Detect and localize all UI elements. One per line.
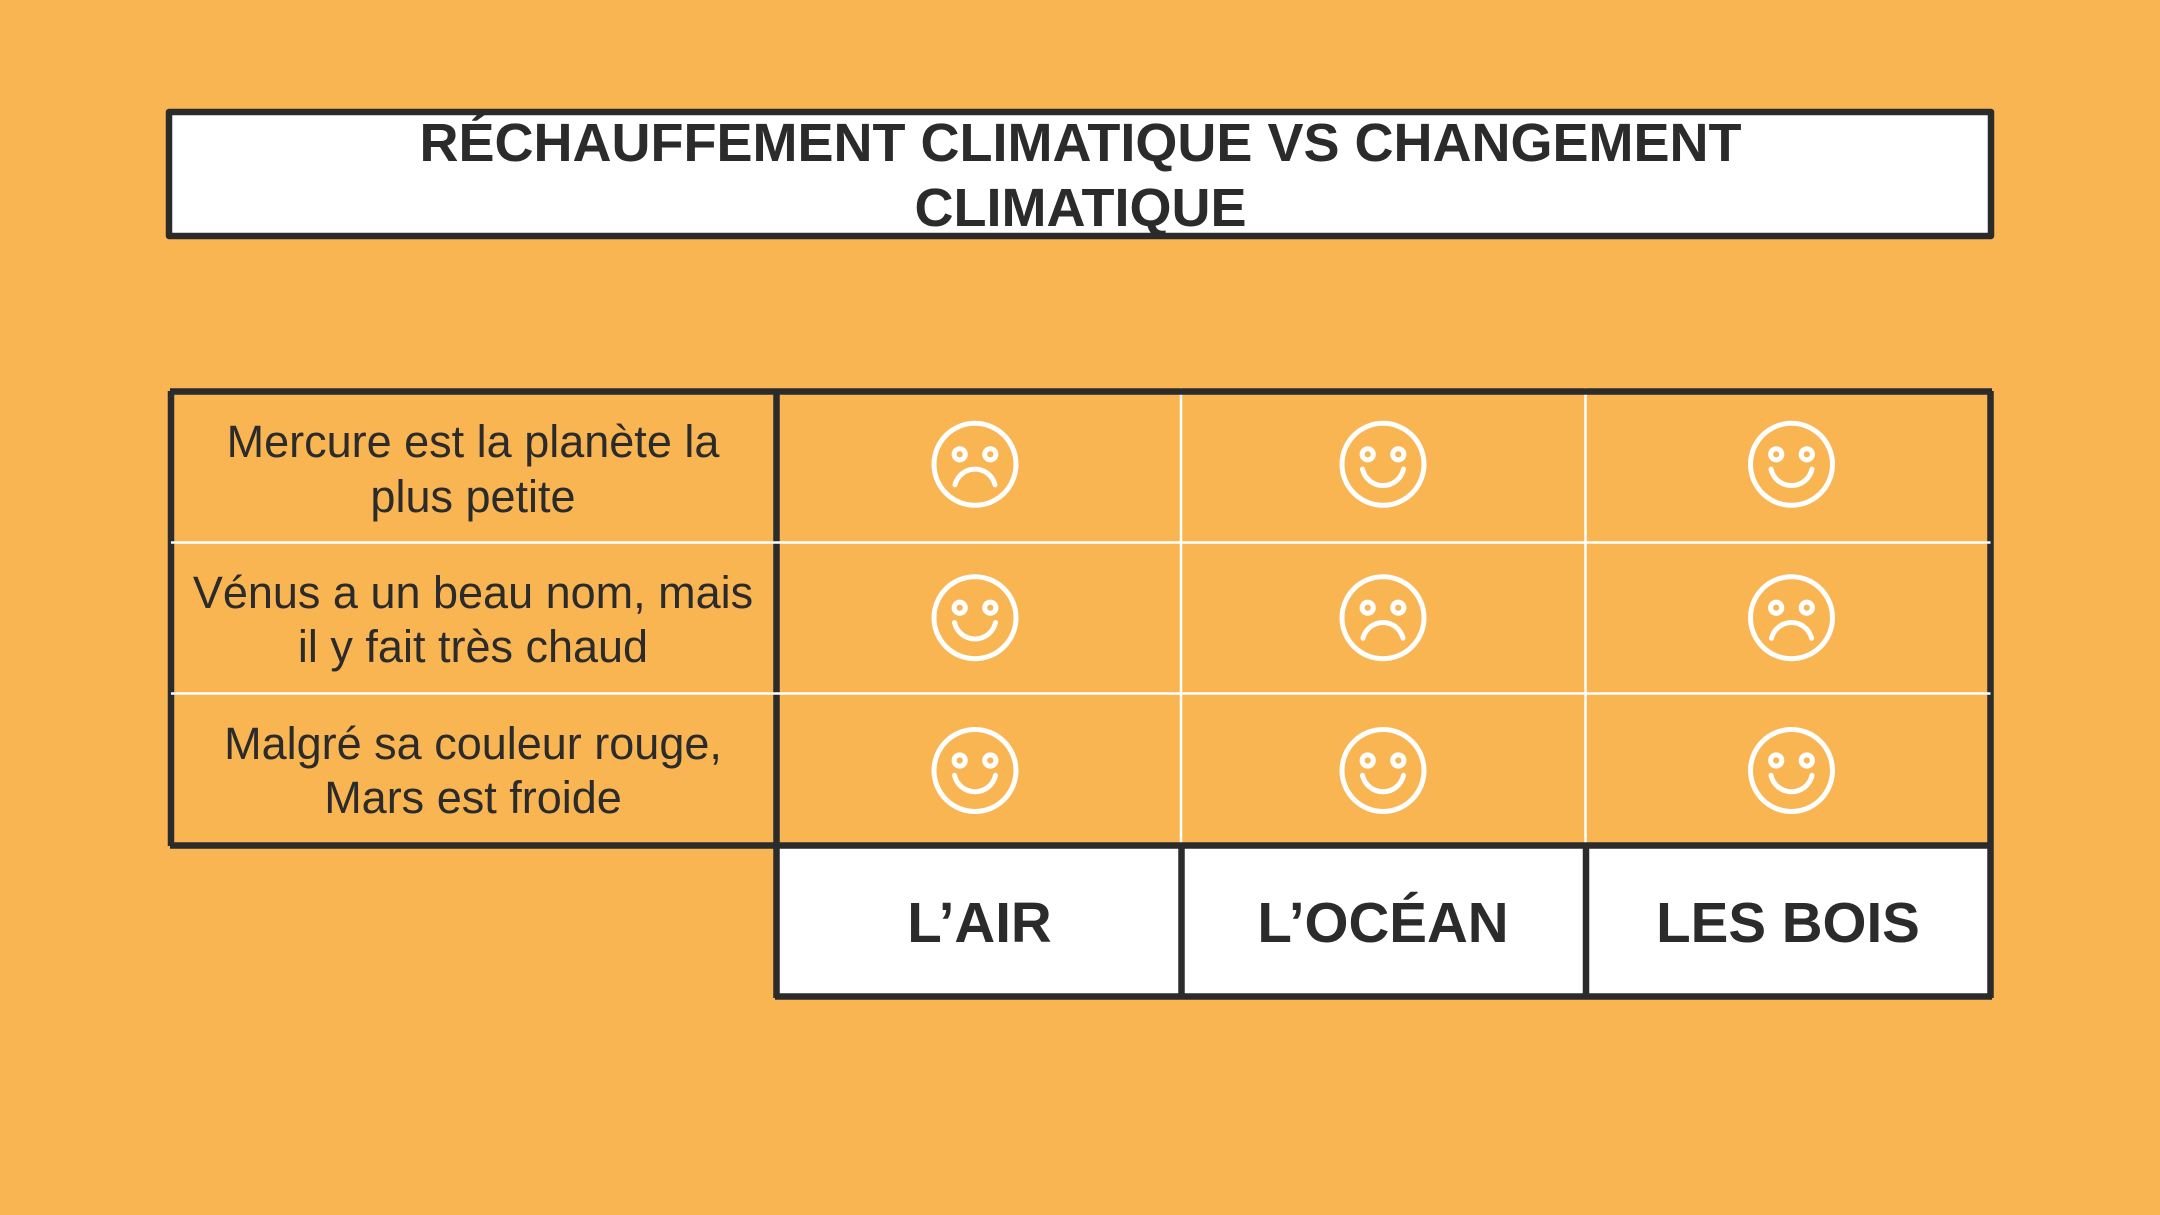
icon: happy face row 2 col 1 [934, 577, 1016, 659]
icon: happy face row 3 col 3 [1750, 730, 1832, 812]
row label 1: plus petite [370, 471, 576, 522]
label: LES BOIS: LES BOIS [1656, 891, 1920, 954]
icon: sad face row 1 col 1 [934, 423, 1016, 505]
label: L'AIR: L’AIR [907, 891, 1052, 954]
table grid [170, 388, 1992, 998]
row label 2 [193, 567, 753, 672]
icon: happy face row 1 col 2 [1342, 423, 1424, 505]
row label 2: il y fait très chaud [298, 621, 648, 672]
icon: sad face row 2 col 3 [1750, 577, 1832, 659]
title banner: CLIMATIQUE [915, 178, 1246, 238]
icon: happy face row 1 col 3 [1750, 423, 1832, 505]
row label 3: Mars est froide [324, 772, 622, 823]
title banner [169, 112, 1991, 238]
row label 1 [227, 416, 720, 522]
row label 3: Malgré sa couleur rouge, [224, 718, 722, 769]
row label 2: Vénus a un beau nom, mais [193, 567, 753, 618]
row label 3 [224, 718, 722, 823]
icon: happy face row 3 col 1 [934, 730, 1016, 812]
label: L'OCÉAN: L’OCÉAN [1257, 891, 1509, 954]
header cells at bottom of table [776, 845, 1990, 996]
row label 1: Mercure est la planète la [227, 416, 720, 467]
title banner: RÉCHAUFFEMENT CLIMATIQUE VS CHANGEMENT [420, 113, 1741, 173]
icon: happy face row 3 col 2 [1342, 730, 1424, 812]
icon: sad face row 2 col 2 [1342, 577, 1424, 659]
